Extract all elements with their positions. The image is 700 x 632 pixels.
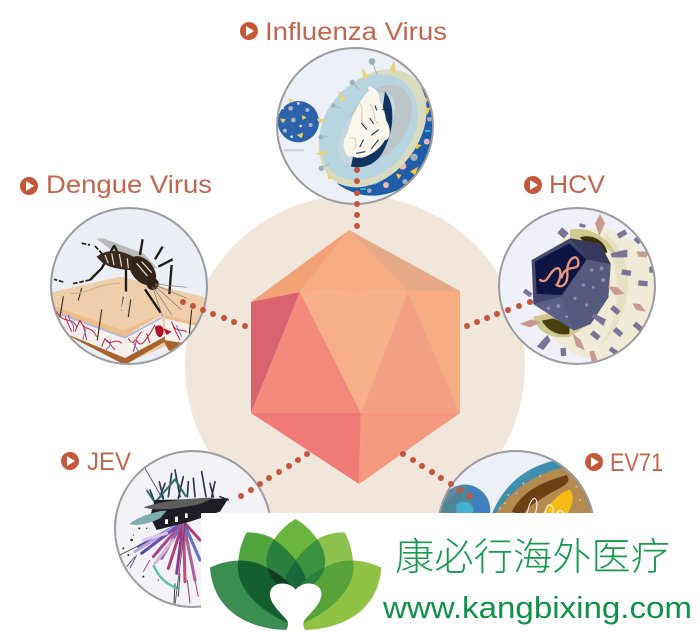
label: Dengue Virus: Dengue Virus bbox=[46, 171, 212, 199]
illustration: mosquito splash (JEV) bbox=[115, 451, 271, 607]
logo: green lotus with heart bbox=[210, 519, 381, 632]
illustration: mosquito on skin (dengue) bbox=[47, 208, 210, 365]
brand url: www.kangbixing.com bbox=[382, 590, 692, 625]
illustration: influenza virus bbox=[277, 48, 449, 208]
label: EV71 bbox=[585, 449, 663, 477]
label: HCV: HCV bbox=[549, 171, 605, 199]
label: HCV bbox=[524, 171, 605, 199]
central icosahedron virus capsid bbox=[251, 230, 460, 484]
watermark panel bbox=[201, 513, 700, 632]
dotted connectors bbox=[180, 167, 533, 499]
illustration: EV71 virus bbox=[438, 450, 594, 513]
brand name: 康必行海外医疗 bbox=[395, 526, 670, 581]
label: JEV: JEV bbox=[87, 448, 131, 476]
illustration: HCV particle bbox=[499, 208, 657, 364]
label: EV71: EV71 bbox=[610, 449, 663, 477]
label: Influenza Virus: Influenza Virus bbox=[265, 18, 447, 46]
backdrop circle bbox=[185, 195, 525, 535]
label: JEV bbox=[61, 448, 131, 476]
